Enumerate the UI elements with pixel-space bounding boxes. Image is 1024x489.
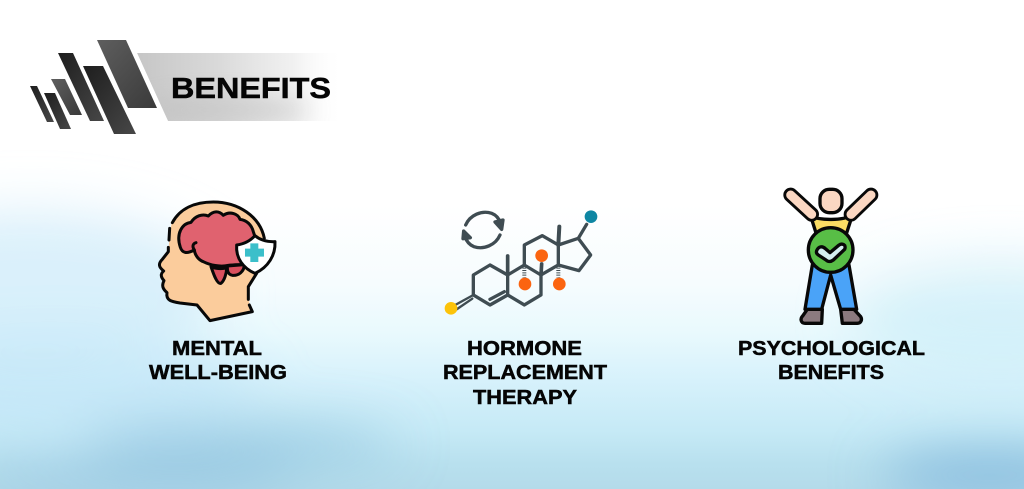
label: mental well-being: MENTAL bbox=[172, 338, 262, 360]
icon: atoms bbox=[445, 210, 597, 315]
column: psychological benefits bbox=[738, 189, 925, 384]
icon: cycle arrows bbox=[463, 212, 503, 248]
label: hormone replacement therapy: THERAPY bbox=[473, 387, 578, 409]
icon: head bbox=[820, 189, 842, 213]
label: psychological benefits: BENEFITS bbox=[778, 362, 884, 384]
icon: arms bbox=[791, 195, 871, 214]
icon: medical cross bbox=[245, 243, 264, 262]
label: hormone replacement therapy: REPLACEMENT bbox=[443, 362, 607, 384]
column: hormone replacement therapy bbox=[443, 210, 607, 409]
icon: head with brain and shield bbox=[159, 202, 275, 321]
label: psychological benefits: PSYCHOLOGICAL bbox=[738, 338, 925, 360]
label: hormone replacement therapy: HORMONE bbox=[467, 338, 582, 360]
icon: steroid rings bbox=[453, 224, 591, 310]
heading: BENEFITS bbox=[171, 73, 331, 105]
label: mental well-being bbox=[149, 338, 287, 384]
icon: steroid molecule bbox=[445, 210, 597, 315]
header: benefits banner bbox=[30, 40, 345, 134]
icon: shield bbox=[237, 236, 275, 273]
icon: check badge bbox=[808, 228, 853, 272]
label: mental well-being: WELL-BEING bbox=[149, 362, 287, 384]
column: mental well-being bbox=[149, 202, 287, 384]
label: psychological benefits bbox=[738, 338, 925, 384]
banner stripes logo bbox=[30, 40, 157, 134]
icon: legs bbox=[805, 265, 857, 309]
icon: person with raised arms and check badge bbox=[791, 189, 871, 323]
icon: shoes bbox=[801, 309, 822, 323]
icon: torso bbox=[811, 215, 852, 235]
label: hormone replacement therapy bbox=[443, 338, 607, 409]
banner ribbon bbox=[137, 53, 316, 121]
